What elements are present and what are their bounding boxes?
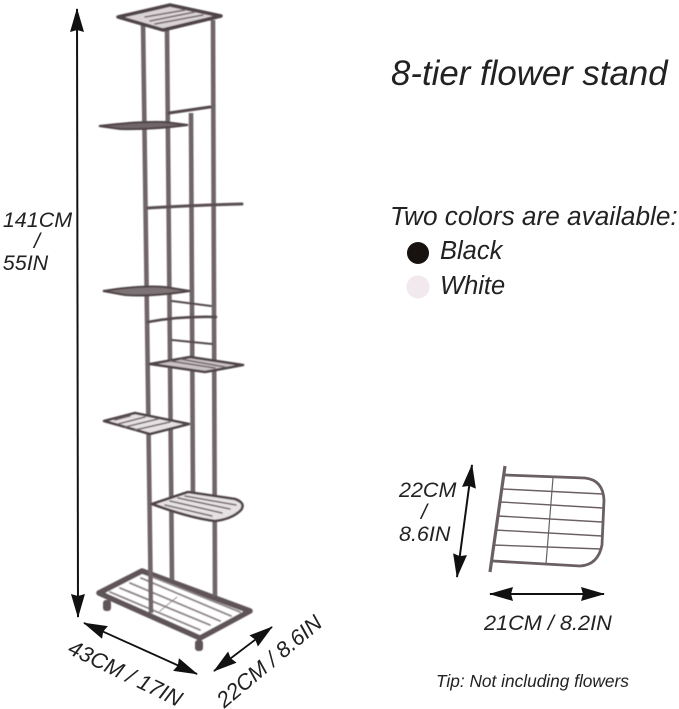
title: 8-tier flower stand <box>391 54 669 93</box>
base shelf <box>99 571 250 651</box>
shelf depth label: 8.6IN <box>399 522 451 546</box>
shelf width arrow <box>490 593 604 595</box>
width arrow <box>214 627 272 671</box>
shelf 7 <box>152 492 243 521</box>
foot left <box>103 600 111 611</box>
shelf depth label: 22CM <box>398 478 456 502</box>
depth arrow <box>84 623 197 674</box>
color option: black: Black <box>440 237 504 265</box>
colors heading: Two colors are available: <box>390 201 678 231</box>
color option: black <box>407 237 504 265</box>
height label: 141CM <box>3 208 72 232</box>
shelf depth label: / <box>419 500 429 524</box>
shelf depth arrow <box>457 465 472 577</box>
foot right <box>195 640 203 651</box>
shelf 1 top <box>118 5 221 30</box>
shelf 4 <box>103 286 190 296</box>
connector bars <box>148 107 216 344</box>
posts <box>143 20 215 613</box>
tip note: Tip: Not including flowers <box>436 671 629 691</box>
shelf width label: 21CM / 8.2IN <box>483 610 612 635</box>
shelf detail diagram <box>490 466 604 572</box>
height label: 55IN <box>3 251 49 275</box>
shelf 5 <box>150 357 243 372</box>
shelf 6 <box>104 413 189 434</box>
shelf 2 <box>99 122 188 129</box>
height arrow <box>77 9 78 617</box>
color option: white <box>406 272 505 300</box>
height label: / <box>32 229 42 253</box>
shelf 3 <box>148 204 242 208</box>
flower stand illustration <box>99 5 250 651</box>
color option: white: White <box>440 272 505 300</box>
